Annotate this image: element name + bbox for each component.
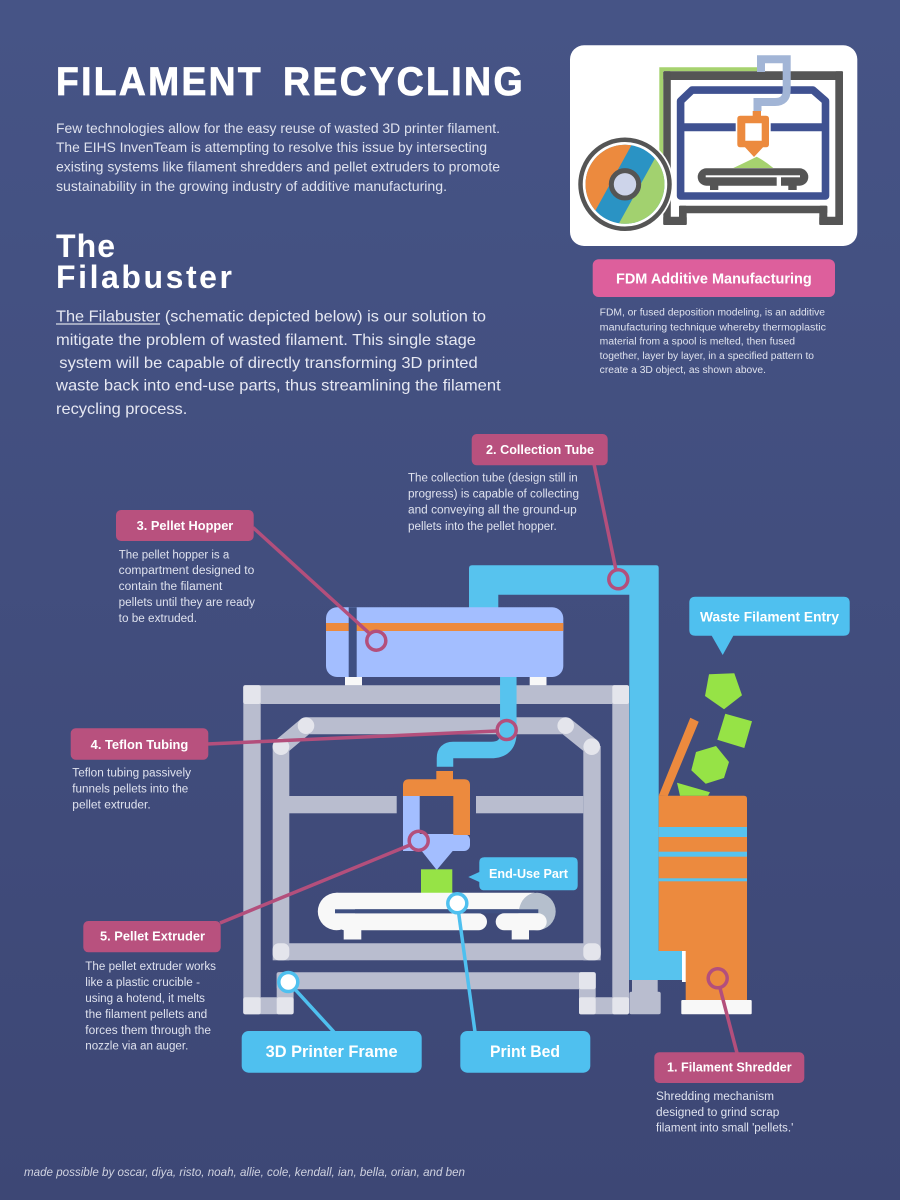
leader: collection tube	[594, 464, 628, 589]
pellet hopper	[326, 607, 563, 685]
label: 5. Pellet Extruder	[83, 921, 221, 952]
pellet extruder description: nozzle via an auger.	[85, 1040, 188, 1052]
collection tube	[469, 565, 682, 980]
Filabuster description	[55, 309, 501, 418]
panel: FDM printer illustration card	[570, 45, 857, 246]
end-use part	[421, 869, 452, 893]
teflon tubing description: funnels pellets into the	[72, 784, 188, 796]
button: 3D Printer Frame: 3D Printer Frame	[266, 1043, 398, 1061]
Filabuster description: The Filabuster (schematic depicted below) is our solution to	[56, 309, 486, 326]
FDM description: manufacturing technique whereby thermoplastic	[600, 322, 826, 333]
label: 2. Collection Tube: 2. Collection Tube	[486, 443, 594, 457]
title	[56, 60, 525, 104]
pellet extruder	[403, 771, 470, 870]
FDM description: FDM, or fused deposition modeling, is an additive	[600, 308, 825, 319]
pellet extruder description: using a hotend, it melts	[85, 993, 205, 1005]
collection tube description: and conveying all the ground-up	[408, 505, 577, 517]
label: FDM Additive Manufacturing	[593, 259, 835, 297]
icon: green filament path	[661, 69, 763, 155]
label: 4. Teflon Tubing: 4. Teflon Tubing	[91, 738, 188, 752]
intro text: sustainability in the growing industry of additive manufacturing.	[56, 178, 447, 194]
collection tube description: pellets into the pellet hopper.	[408, 521, 557, 533]
pellet hopper description: compartment designed to	[119, 565, 254, 577]
pellet extruder description: like a plastic crucible -	[85, 977, 200, 989]
leader: teflon tubing	[207, 720, 516, 744]
title: RECYCLING	[283, 60, 525, 104]
3D printer frame	[243, 685, 629, 1014]
tube support block	[629, 980, 661, 1014]
button: 3D Printer Frame	[242, 1031, 422, 1073]
FDM description: material from a spool is melted, then fused	[600, 336, 795, 348]
Filabuster description: waste back into end-use parts, thus streamlining the filament	[55, 378, 501, 395]
leader: pellet hopper	[253, 528, 386, 650]
teflon tubing	[445, 677, 508, 767]
pellet hopper description: The pellet hopper is a	[119, 549, 230, 561]
button: Print Bed: Print Bed	[490, 1043, 560, 1061]
tube end bracket	[682, 949, 686, 982]
leader: printer frame	[279, 972, 334, 1032]
label: 5. Pellet Extruder: 5. Pellet Extruder	[100, 930, 205, 944]
leader: print bed	[448, 894, 475, 1032]
button: Print Bed	[460, 1031, 590, 1073]
teflon tubing description: Teflon tubing passively	[72, 768, 191, 780]
label: FDM Additive Manufacturing: FDM Additive Manufacturing	[616, 271, 812, 287]
callout: waste filament entry	[689, 597, 850, 655]
label: 4. Teflon Tubing	[71, 728, 208, 760]
collection tube description: progress) is capable of collecting	[408, 489, 579, 501]
label: 3. Pellet Hopper	[116, 510, 254, 541]
label: 2. Collection Tube	[472, 434, 608, 465]
pellet extruder description: the filament pellets and	[85, 1009, 207, 1021]
heading: The Filabuster: Filabuster	[56, 259, 232, 295]
pellet hopper description: pellets until they are ready	[119, 597, 255, 609]
pellet hopper description: to be extruded.	[119, 613, 197, 625]
callout: waste filament entry: Waste Filament Entry	[700, 609, 839, 625]
filament shredder description: filament into small 'pellets.'	[656, 1123, 793, 1135]
intro text: existing systems like filament shredders and pellet extruders to promote	[56, 158, 500, 174]
pellet hopper description	[119, 549, 255, 625]
waste filament pellets	[677, 673, 752, 796]
pellet extruder description: forces them through the	[85, 1025, 211, 1037]
panel: Filabuster schematic	[207, 464, 850, 1073]
shredder hatch	[659, 718, 699, 796]
filament shredder description	[656, 1091, 793, 1135]
callout: end-use part: End-Use Part	[489, 867, 569, 881]
icon: printer cross bars	[680, 123, 825, 131]
FDM description	[600, 308, 826, 376]
icon: printer inner frame	[681, 90, 826, 196]
icon: printed mound	[733, 157, 773, 168]
Filabuster description: recycling process.	[56, 401, 187, 418]
pellet hopper description: contain the filament	[119, 581, 223, 593]
label: 3. Pellet Hopper: 3. Pellet Hopper	[137, 519, 233, 533]
icon: extruder head	[737, 111, 769, 157]
teflon tubing description: pellet extruder.	[72, 799, 151, 811]
Filabuster description: system will be capable of directly transforming 3D printed	[59, 355, 478, 372]
leader: pellet extruder	[220, 831, 428, 923]
FDM description: together, layer by layer, in a specified pattern to	[600, 351, 814, 362]
pellet extruder description	[85, 961, 216, 1052]
icon: print bed	[698, 168, 808, 190]
intro text: Few technologies allow for the easy reuse of wasted 3D printer filament.	[56, 120, 500, 136]
title: FILAMENT	[56, 60, 263, 104]
icon: printer outer frame	[663, 71, 843, 225]
print bed	[318, 893, 556, 940]
footer credits: made possible by oscar, diya, risto, noah, allie, cole, kendall, ian, bella, orian, and ben	[24, 1165, 465, 1179]
collection tube description: The collection tube (design still in	[408, 473, 578, 485]
FDM description: create a 3D object, as shown above.	[600, 365, 766, 376]
intro text: The EIHS InvenTeam is attempting to resolve this issue by intersecting	[56, 139, 487, 155]
icon: filament tube	[758, 59, 787, 111]
intro text	[56, 120, 500, 194]
pellet extruder description: The pellet extruder works	[85, 961, 216, 973]
filament shredder description: designed to grind scrap	[656, 1107, 779, 1119]
teflon tubing description	[72, 768, 191, 811]
callout: end-use part	[468, 857, 578, 890]
label: 1. Filament Shredder: 1. Filament Shredder	[667, 1061, 792, 1075]
heading: The Filabuster: The	[56, 228, 115, 264]
filament shredder description: Shredding mechanism	[656, 1091, 774, 1103]
collection tube description	[408, 473, 579, 533]
leader: filament shredder	[708, 969, 737, 1053]
Filabuster description: mitigate the problem of wasted filament. This single stage	[56, 332, 476, 349]
frame joints	[243, 685, 629, 1014]
heading: The Filabuster	[56, 228, 232, 295]
filament shredder	[659, 796, 752, 1014]
icon: filament spool	[578, 138, 672, 231]
label: 1. Filament Shredder	[654, 1052, 804, 1083]
